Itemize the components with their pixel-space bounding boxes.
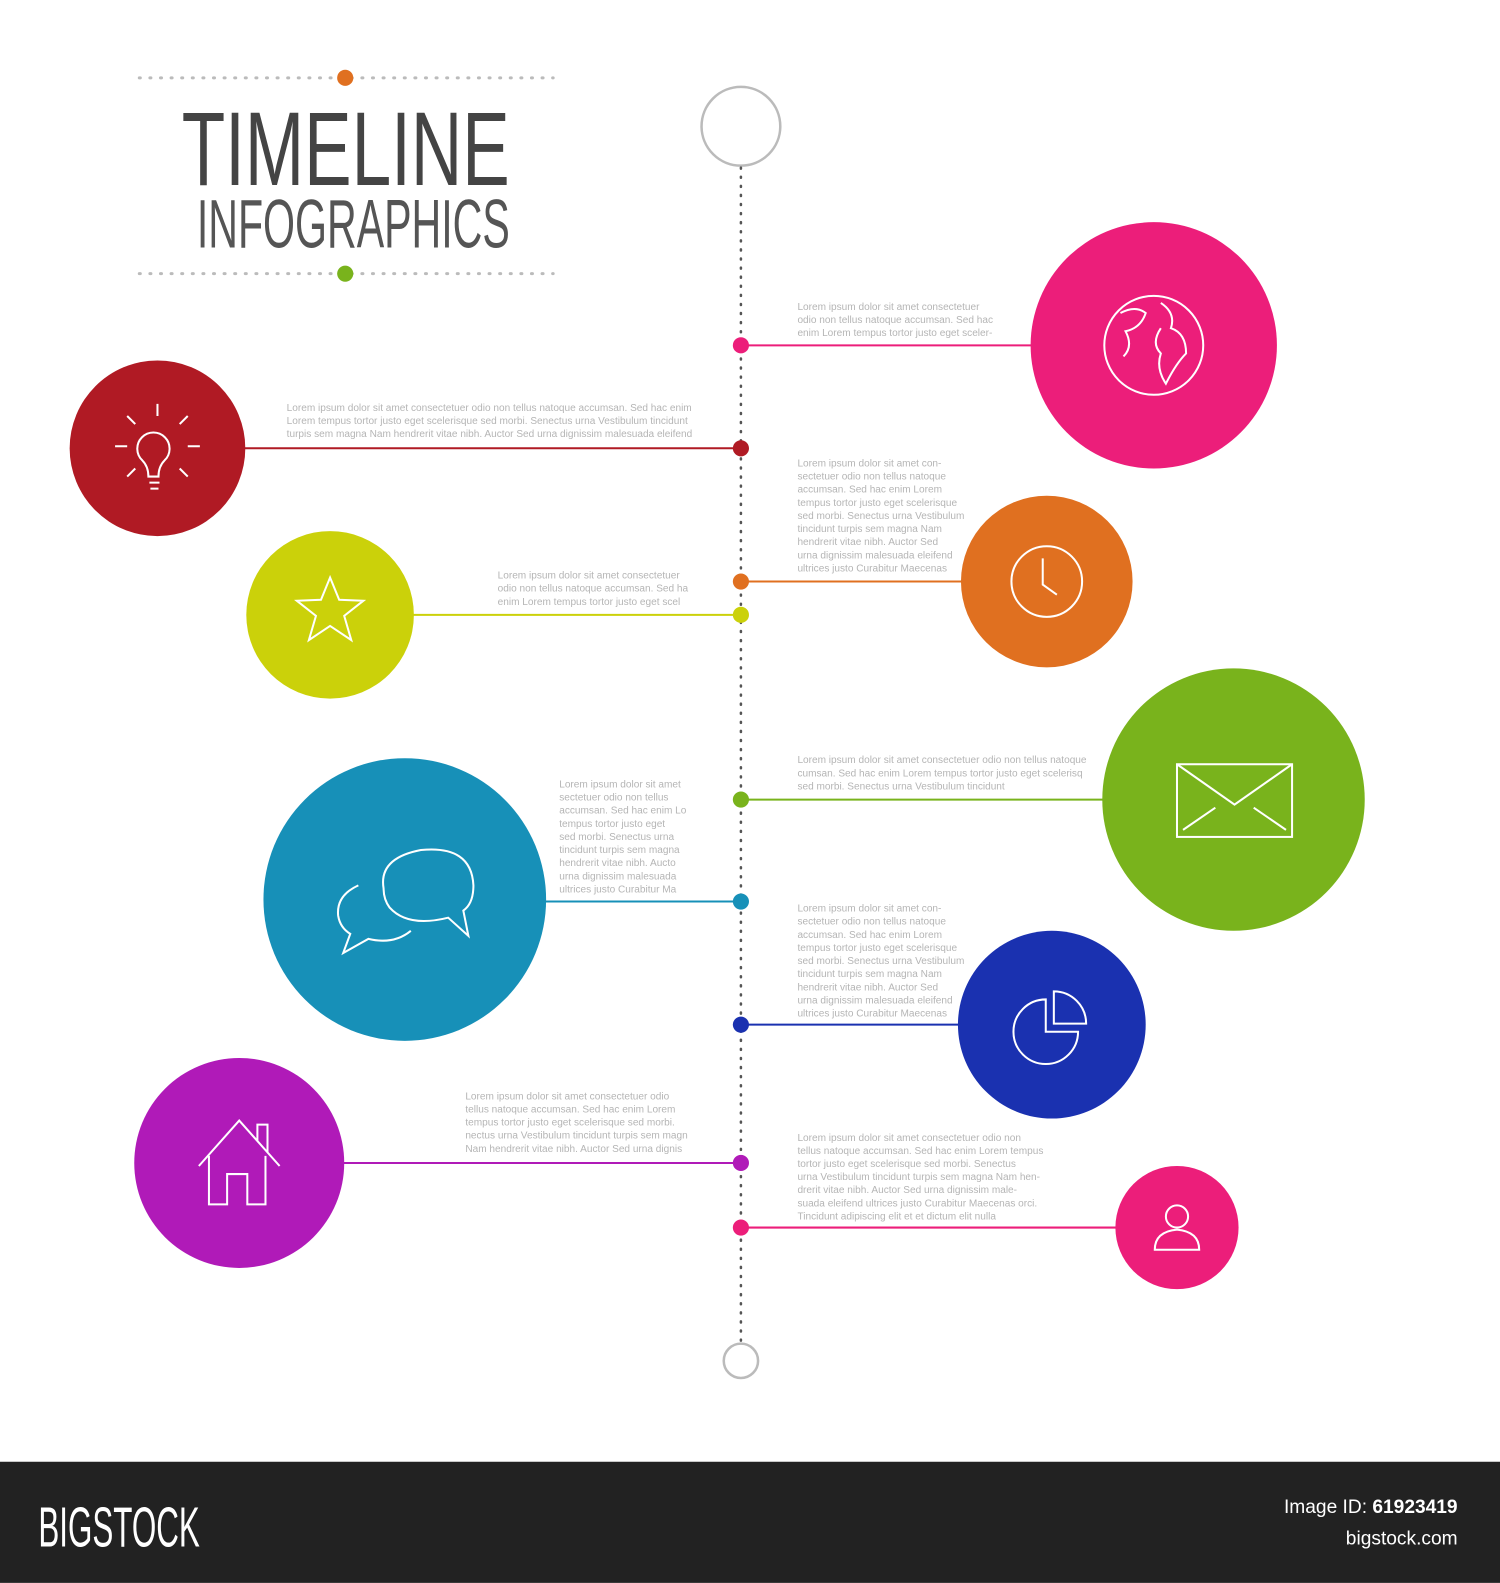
- item: chat: tincidunt turpis sem magna: [559, 845, 680, 856]
- item: user: Lorem ipsum dolor sit amet consectetuer odio non: [797, 1133, 1021, 1144]
- item: pie chart: Lorem ipsum dolor sit amet con-: [797, 904, 941, 915]
- item: globe: enim Lorem tempus tortor justo eget sceler-: [797, 328, 992, 339]
- item: clock: sectetuer odio non tellus natoque: [797, 472, 946, 483]
- item: user: tortor justo eget scelerisque sed morbi. Senectus: [797, 1159, 1016, 1170]
- item: pie chart: sectetuer odio non tellus natoque: [797, 917, 946, 928]
- item: home: [134, 1058, 749, 1268]
- item: chat: hendrerit vitae nibh. Aucto: [559, 858, 676, 869]
- item: chat: urna dignissim malesuada: [559, 871, 677, 882]
- item: clock: Lorem ipsum dolor sit amet con-: [797, 458, 941, 469]
- item: globe: [733, 222, 1277, 468]
- item: bulb: Lorem tempus tortor justo eget scelerisque sed morbi. Senectus urna Vestibulum tincidunt: [287, 416, 688, 427]
- item: clock: tempus tortor justo eget scelerisque: [797, 498, 957, 509]
- item: pie chart: [733, 904, 1146, 1119]
- item: star: odio non tellus natoque accumsan. Sed ha: [498, 584, 689, 595]
- item: bulb: turpis sem magna Nam hendrerit vitae nibh. Auctor Sed urna dignissim malesuada eleifend: [287, 429, 692, 440]
- item: star: enim Lorem tempus tortor justo eget scel: [498, 597, 680, 608]
- item: bulb: [70, 360, 749, 536]
- item: user: [733, 1133, 1239, 1289]
- item: home: Nam hendrerit vitae nibh. Auctor Sed urna dignis: [465, 1144, 682, 1155]
- footer: Image ID: 61923419: [1284, 1497, 1458, 1518]
- item: pie chart: urna dignissim malesuada eleifend: [797, 995, 953, 1006]
- footer: BIGSTOCK: [38, 1496, 200, 1559]
- item: pie chart: hendrerit vitae nibh. Auctor Sed: [797, 982, 938, 993]
- item: mail: cumsan. Sed hac enim Lorem tempus tortor justo eget scelerisq: [797, 768, 1083, 779]
- item: bulb: Lorem ipsum dolor sit amet consectetuer odio non tellus natoque accumsan. Sed hac enim: [287, 403, 692, 414]
- footer: bigstock.com: [1346, 1529, 1458, 1550]
- item: user: suada eleifend ultrices justo Curabitur Maecenas orci.: [797, 1198, 1037, 1209]
- item: clock: hendrerit vitae nibh. Auctor Sed: [797, 537, 938, 548]
- timeline axis: [702, 87, 780, 1378]
- item: home: tellus natoque accumsan. Sed hac enim Lorem: [465, 1104, 675, 1115]
- item: chat: [263, 758, 749, 1041]
- item: user: tellus natoque accumsan. Sed hac enim Lorem tempus: [797, 1146, 1043, 1157]
- item: chat: ultrices justo Curabitur Ma: [559, 884, 677, 895]
- item: chat: sed morbi. Senectus urna: [559, 832, 674, 843]
- item: home: nectus urna Vestibulum tincidunt turpis sem magn: [465, 1131, 688, 1142]
- item: pie chart: ultrices justo Curabitur Maecenas: [797, 1009, 947, 1020]
- item: clock: sed morbi. Senectus urna Vestibulum: [797, 511, 964, 522]
- item: user: drerit vitae nibh. Auctor Sed urna dignissim male-: [797, 1185, 1017, 1196]
- item: pie chart: tincidunt turpis sem magna Nam: [797, 969, 942, 980]
- item: star: Lorem ipsum dolor sit amet consectetuer: [498, 571, 680, 582]
- item: clock: urna dignissim malesuada eleifend: [797, 550, 953, 561]
- item: globe: Lorem ipsum dolor sit amet consectetuer: [797, 302, 980, 313]
- title: INFOGRAPHICS: [197, 185, 510, 262]
- item: clock: accumsan. Sed hac enim Lorem: [797, 485, 942, 496]
- item: mail: [733, 668, 1365, 931]
- title: [139, 70, 553, 282]
- item: clock: tincidunt turpis sem magna Nam: [797, 524, 942, 535]
- item: clock: [733, 458, 1133, 667]
- item: user: urna Vestibulum tincidunt turpis sem magna Nam hen-: [797, 1172, 1040, 1183]
- item: chat: accumsan. Sed hac enim Lo: [559, 806, 687, 817]
- item: mail: sed morbi. Senectus urna Vestibulum tincidunt: [797, 781, 1005, 792]
- item: clock: ultrices justo Curabitur Maecenas: [797, 563, 947, 574]
- item: globe: odio non tellus natoque accumsan. Sed hac: [797, 315, 993, 326]
- item: pie chart: sed morbi. Senectus urna Vestibulum: [797, 956, 964, 967]
- item: pie chart: accumsan. Sed hac enim Lorem: [797, 930, 942, 941]
- item: mail: Lorem ipsum dolor sit amet consectetuer odio non tellus natoque: [797, 755, 1087, 766]
- item: chat: sectetuer odio non tellus: [559, 793, 668, 804]
- item: user: Tincidunt adipiscing elit et et dictum elit nulla: [797, 1211, 996, 1222]
- item: chat: Lorem ipsum dolor sit amet: [559, 779, 681, 790]
- item: star: [246, 531, 749, 699]
- item: home: Lorem ipsum dolor sit amet consectetuer odio: [465, 1091, 670, 1102]
- title: TIMELINE: [182, 91, 510, 208]
- item: chat: tempus tortor justo eget: [559, 819, 665, 830]
- footer: [0, 1462, 1500, 1583]
- item: home: tempus tortor justo eget scelerisque sed morbi.: [465, 1118, 675, 1129]
- item: pie chart: tempus tortor justo eget scelerisque: [797, 943, 957, 954]
